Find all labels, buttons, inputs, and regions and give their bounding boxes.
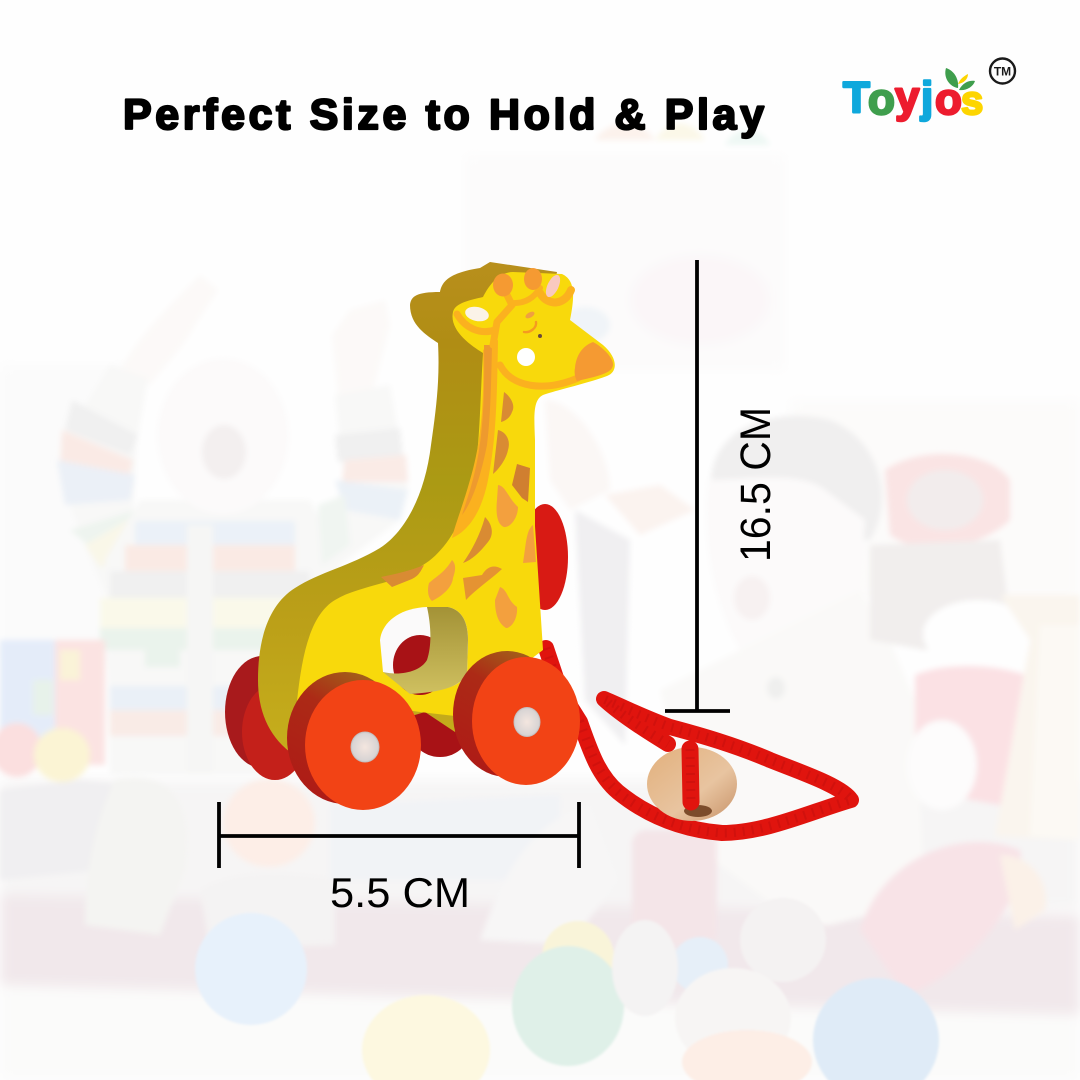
- logo: Toyjos: [843, 58, 1015, 124]
- lower left clothing: [0, 780, 130, 880]
- neck stripe and mane: [452, 340, 498, 538]
- body hole: [380, 607, 468, 695]
- blocks: [0, 640, 55, 750]
- right child face: [706, 478, 865, 650]
- width label: 5.5 CM: [330, 869, 470, 916]
- title: Perfect Size to Hold & Play: [123, 91, 764, 139]
- front right wheel: [453, 651, 580, 785]
- logo wordmark: y: [895, 73, 920, 122]
- sweater body: [105, 500, 340, 775]
- middle child dark clothes and hand: [575, 510, 630, 745]
- trademark badge: TM: [994, 64, 1011, 78]
- front left wheel: [287, 672, 421, 810]
- right sleeve: [300, 385, 408, 600]
- baby head: [157, 358, 289, 514]
- crown markings: [457, 288, 578, 386]
- logo wordmark: j: [920, 73, 933, 122]
- logo leaves: [945, 68, 975, 90]
- teddy toys: [885, 454, 1010, 548]
- right child hair: [711, 416, 882, 540]
- logo wordmark: o: [868, 75, 895, 124]
- horn tips: [464, 268, 563, 323]
- left sleeve: [60, 365, 148, 600]
- logo wordmark: s: [961, 79, 983, 123]
- eye and snout: [517, 310, 613, 381]
- wooden bead: [647, 747, 737, 821]
- feet at the front right: [632, 830, 717, 945]
- height label: 16.5 CM: [732, 407, 780, 562]
- body spots: [381, 392, 536, 628]
- back wheels: [225, 656, 472, 780]
- logo wordmark: o: [935, 75, 962, 124]
- shelf toys: [595, 124, 655, 140]
- giraffe side: [258, 262, 557, 752]
- head markings: [457, 268, 613, 386]
- pull rope: [522, 504, 851, 833]
- height dimension line: [665, 260, 730, 711]
- logo wordmark: T: [843, 73, 870, 122]
- hands: [120, 275, 218, 385]
- toy balls: [195, 913, 307, 1025]
- product: giraffe pull toy: [225, 262, 851, 833]
- giraffe face: [297, 272, 615, 716]
- width dimension line: [219, 802, 580, 868]
- right child sweater: [660, 590, 925, 925]
- trademark badge: [990, 58, 1015, 84]
